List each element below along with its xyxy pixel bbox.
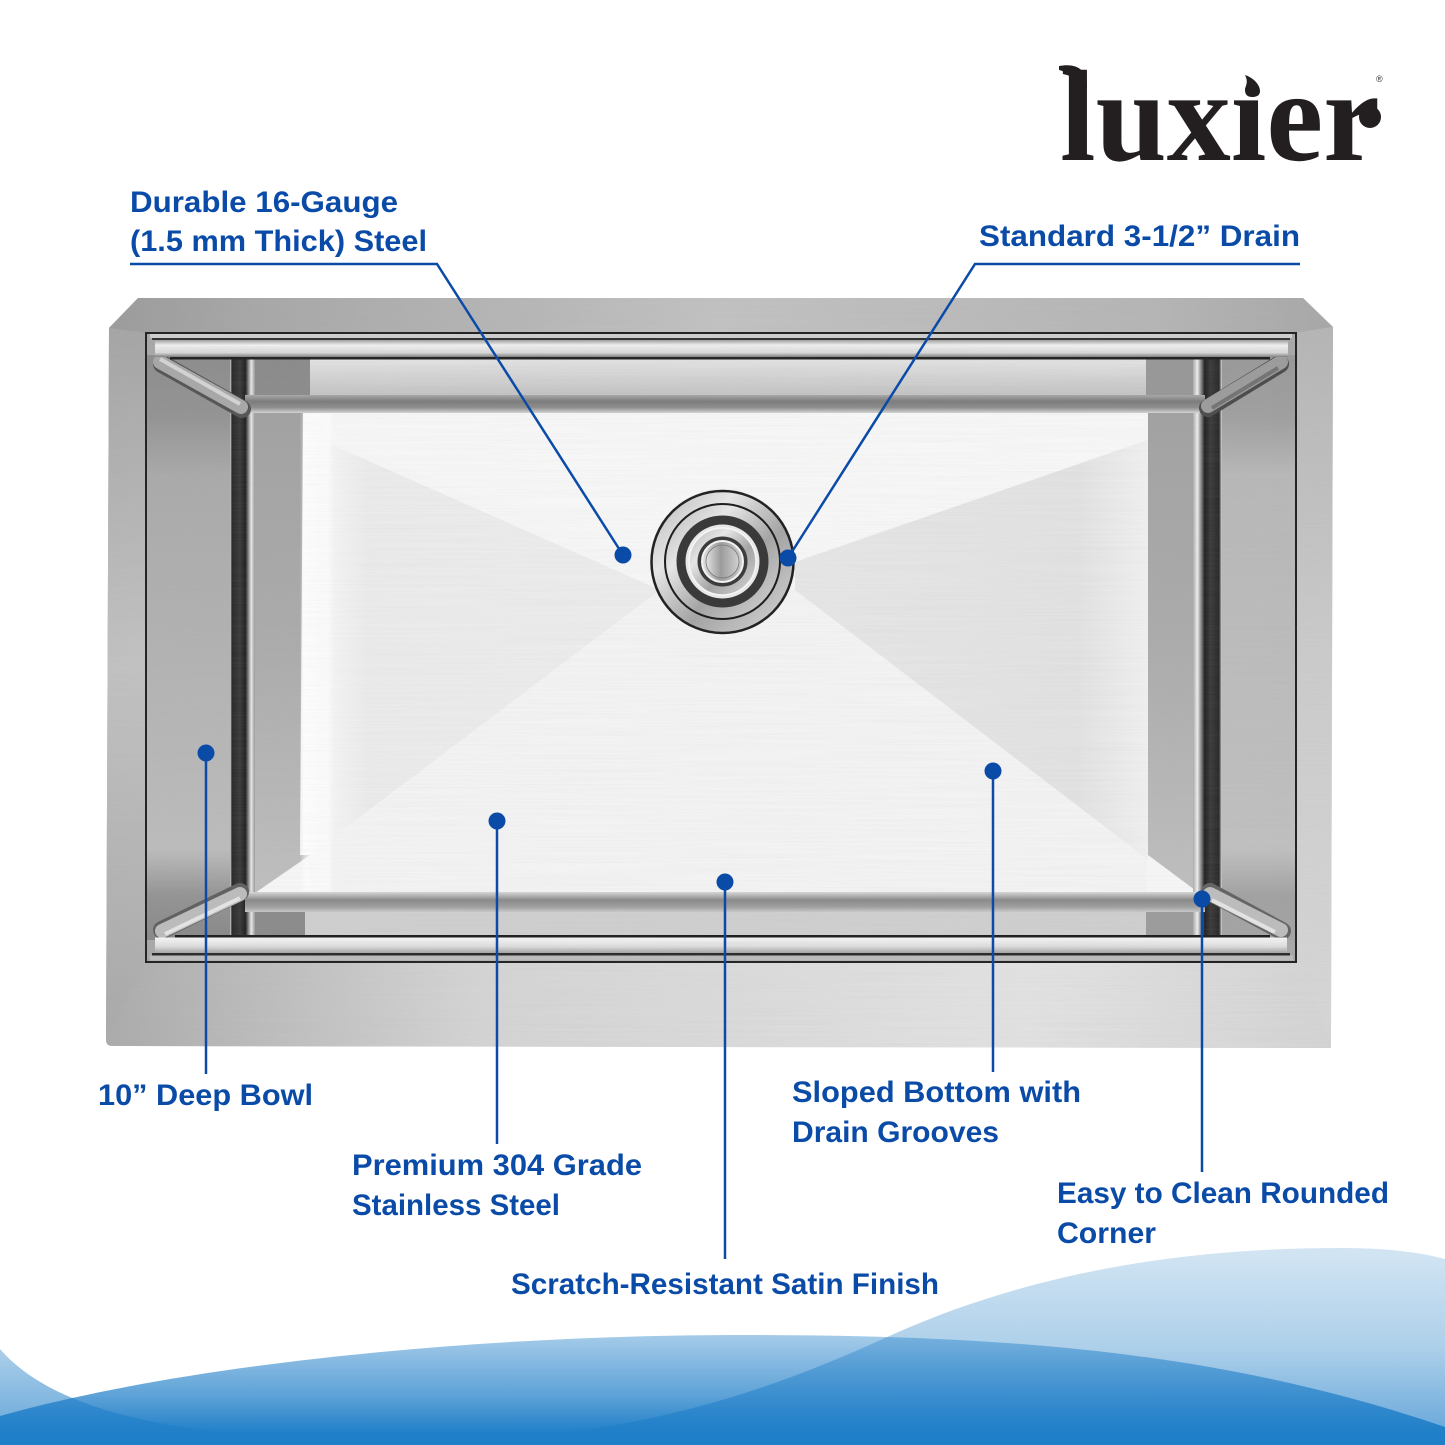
callout: durable 16-gauge steel bbox=[130, 186, 632, 564]
callout: 304 grade steel bbox=[352, 812, 642, 1222]
panel: sink photo bbox=[106, 298, 1334, 1048]
callout: rounded corner bbox=[1057, 890, 1389, 1250]
callout: satin finish bbox=[511, 874, 939, 1301]
callout: durable 16-gauge steel: Durable 16-Gauge bbox=[130, 186, 398, 219]
callout: sloped bottom: Sloped Bottom with bbox=[792, 1076, 1081, 1109]
corner grooves bbox=[230, 358, 1222, 936]
callout: satin finish: Scratch-Resistant Satin Finish bbox=[511, 1268, 939, 1301]
sink floor with sloped facets bbox=[245, 410, 1205, 896]
drain strainer bbox=[650, 489, 795, 634]
registered mark: ® bbox=[1376, 74, 1383, 84]
callout: 304 grade steel: Premium 304 Grade bbox=[352, 1149, 642, 1182]
callout: rounded corner: Corner bbox=[1057, 1217, 1157, 1250]
logo accent: l flag bbox=[1059, 65, 1087, 88]
callout: standard drain: Standard 3-1/2” Drain bbox=[979, 220, 1300, 253]
callout: durable 16-gauge steel: (1.5 mm Thick) Steel bbox=[130, 225, 427, 258]
logo accent: r teardrop bbox=[1359, 106, 1381, 128]
rounded corner rods bbox=[160, 359, 1282, 934]
callout: deep bowl bbox=[98, 744, 313, 1112]
logo: luxier: luxier bbox=[1060, 45, 1380, 189]
wave: right light crest bbox=[0, 1248, 1445, 1445]
brushed steel texture bbox=[106, 298, 1334, 1048]
bottom rim rail bbox=[150, 935, 1293, 960]
logo accent: i teardrop bbox=[1237, 67, 1261, 97]
callout: standard drain bbox=[780, 220, 1300, 566]
sink bowl opening bbox=[145, 332, 1297, 963]
callout: sloped bottom bbox=[792, 762, 1081, 1149]
top rim rail bbox=[150, 334, 1292, 360]
sink outer flange bbox=[106, 298, 1333, 1048]
callout: 304 grade steel: Stainless Steel bbox=[352, 1189, 560, 1222]
callout: deep bowl: 10” Deep Bowl bbox=[98, 1079, 313, 1112]
decorative waves bbox=[0, 1248, 1445, 1445]
callout: rounded corner: Easy to Clean Rounded bbox=[1057, 1177, 1389, 1210]
callout: sloped bottom: Drain Grooves bbox=[792, 1116, 999, 1149]
wave: left darker crest bbox=[0, 1335, 1445, 1445]
